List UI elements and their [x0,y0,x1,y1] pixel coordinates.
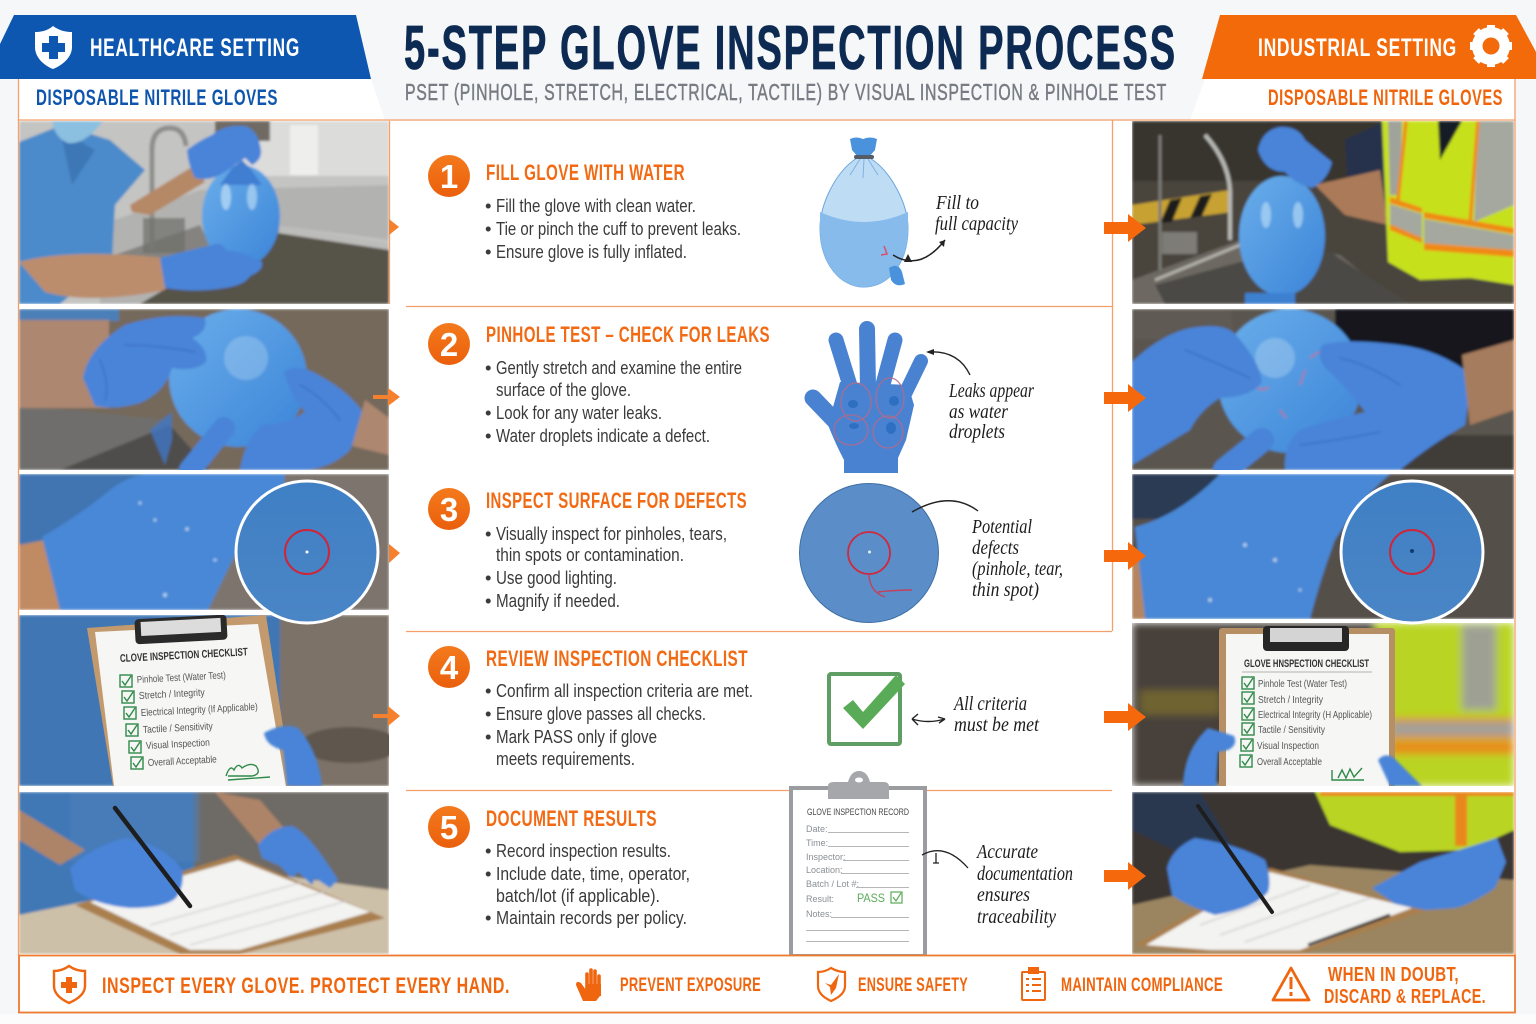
step 2 text [485,357,742,446]
arrows: left flow markers [373,219,400,726]
step 1 text: Tie or pinch the cuff to prevent leaks. [496,218,741,239]
holding glove [264,726,322,786]
illustration: water-filled glove [820,138,908,287]
panel: step 5 [428,771,1073,956]
step 4 text: • [485,703,491,724]
step 5 heading: DOCUMENT RESULTS [486,806,657,831]
checklist rows: Electrical Integrity (H Applicable) [1258,710,1372,721]
inset: healthcare magnified pinhole [236,481,378,623]
checklist rows: Tactile / Sensitivity [143,721,213,736]
checklist boxes [1240,677,1364,780]
step 4 text: Confirm all inspection criteria are met. [496,680,753,701]
step 4 text: Mark PASS only if glove [496,726,657,747]
photo: healthcare documenting [19,792,389,954]
photo: industrial fill glove [1132,121,1514,304]
gutters between photos [19,121,389,955]
step 4 text: meets requirements. [496,748,635,769]
subheading: healthcare gloves: DISPOSABLE NITRILE GLOVES [36,85,278,110]
illustration: inspection record clipboard: Inspector: [806,852,846,862]
icon: compliance clipboard [1022,968,1045,1000]
heading: healthcare setting: HEALTHCARE SETTING [90,34,300,62]
step 3 text: • [485,567,491,588]
checklist rows: Pinhole Test (Water Test) [137,670,226,686]
photo: industrial pinhole test [1132,309,1514,470]
step 4 text [485,680,753,769]
clipboard clip [1263,626,1349,651]
arrows: right flow markers [1104,214,1146,890]
callout: accurate documentation: ensures [977,884,1030,906]
footer warning text [1324,963,1486,1008]
step 2 text: • [485,425,491,446]
checklist rows: Visual Inspection [146,738,210,752]
step 2 text: Gently stretch and examine the entire [496,357,742,378]
callout: all criteria must be met [912,693,1039,736]
step 4 text: • [485,726,491,747]
checklist rows: Visual Inspection [1257,741,1319,752]
step 3 text: Visually inspect for pinholes, tears, [496,523,727,544]
left glove [1167,838,1269,915]
footer: prevent exposure: PREVENT EXPOSURE [620,975,761,996]
step 3 text: Use good lighting. [496,567,617,588]
checklist rows: Tactile / Sensitivity [1258,725,1325,736]
checklist rows: Overall Acceptable [1257,757,1322,768]
callout: fill to full capacity [893,192,1018,262]
checklist title: GLOVE HNSPECTION CHECKLIST [1244,658,1369,670]
step 2 text: • [485,357,491,378]
step 4 text: • [485,680,491,701]
step 5 text: Maintain records per policy. [496,907,687,928]
photo: industrial documenting [1132,792,1514,954]
step 3 text: • [485,523,491,544]
right glove [258,826,338,888]
step number 3: 3 [440,491,458,528]
checklist rows: Overall Acceptable [148,754,217,769]
step number 2 [428,323,470,365]
pen [1198,806,1272,912]
checklist title: CLOVE INSPECTION CHECKLIST [120,646,248,665]
callout: potential defects: Potential [971,516,1032,538]
photo: healthcare checklist [19,615,400,786]
left glove [83,316,206,407]
step number 4: 4 [440,649,459,686]
icon: gear [1470,25,1512,67]
illustration: magnified defect [800,484,938,622]
panel: centre steps background [389,121,1132,955]
step number 4 [428,646,470,688]
photo: healthcare fill glove [19,121,389,304]
callout: fill to full capacity: Fill to [935,192,979,214]
footer panel [19,956,1515,1012]
step 5 text: batch/lot (if applicable). [496,885,660,906]
checklist rows [1257,679,1372,768]
step 5 text: • [485,840,491,861]
illustration: inspection record clipboard [791,771,925,956]
step 1 text [485,195,741,262]
step number 5 [428,806,470,848]
pen [115,808,190,906]
step 1 text: • [485,241,491,262]
left glove [1132,326,1262,465]
step 3 text: • [485,590,491,611]
illustration: inspection record clipboard: GLOVE INSPECTION RECORD [807,807,909,818]
step 3 heading: INSPECT SURFACE FOR DEFECTS [486,488,747,513]
heading: industrial setting: INDUSTRIAL SETTING [1258,34,1457,62]
photo: healthcare pinhole test [19,309,389,470]
lower glove [160,244,262,290]
holding gloves [1183,728,1422,786]
illustration: glove with leaks [813,329,921,473]
callout: leaks appear as water droplets [926,349,1034,443]
step 1 heading: FILL GLOVE WITH WATER [486,160,685,185]
right glove [1285,342,1472,470]
illustration: inspection record clipboard: Batch / Lot #: [806,879,859,889]
left glove [70,838,183,908]
step 5 text: • [485,907,491,928]
right glove [240,368,364,470]
illustration: inspection record clipboard: Date: [806,824,828,834]
step 5 text: • [485,863,491,884]
callout: accurate documentation: traceability [977,906,1056,928]
illustration: inspection record clipboard: PASS [857,891,885,905]
panel: step 4 [428,646,1039,769]
step number 5: 5 [440,809,458,846]
callout: accurate documentation: documentation [977,863,1073,885]
callout: fill to full capacity: full capacity [935,213,1018,235]
checklist rows: Stretch / Integrity [1258,695,1323,706]
photo: industrial surface inspection [1132,474,1514,619]
step 2 heading: PINHOLE TEST – CHECK FOR LEAKS [486,322,770,347]
step 1 text: • [485,218,491,239]
step 1 text: Ensure glove is fully inflated. [496,241,687,262]
checklist rows: Electrical Integrity (If Applicable) [141,702,258,719]
icon: shield plus [54,966,85,1003]
step number 1: 1 [440,158,458,195]
callout: accurate documentation [922,841,1073,928]
callout: potential defects [912,501,1063,601]
illustration: inspection record clipboard: Time: [806,838,828,848]
icon: healthcare shield [35,26,72,69]
photo: industrial checklist [1132,623,1514,788]
step 1 text: • [485,195,491,216]
step 1 text: Fill the glove with clean water. [496,195,696,216]
step 3 text: Magnify if needed. [496,590,620,611]
right glove [1372,838,1506,910]
clipboard clip [134,615,228,644]
step 4 heading: REVIEW INSPECTION CHECKLIST [486,646,748,671]
step number 1 [428,155,470,197]
step 2 text: • [485,402,491,423]
checklist boxes [120,675,270,780]
callout: potential defects: thin spot) [972,579,1039,601]
illustration: inspection record clipboard: Notes: [806,909,832,919]
panel: step 1 [428,138,1018,287]
step 2 text: Look for any water leaks. [496,402,662,423]
callout: all criteria must be met: All criteria [952,693,1027,715]
callout: accurate documentation: Accurate [975,841,1038,863]
footer slogan: INSPECT EVERY GLOVE. PROTECT EVERY HAND. [102,973,510,998]
footer: maintain compliance: MAINTAIN COMPLIANCE [1061,975,1223,996]
step 3 text [485,523,727,611]
illustration: inspection record clipboard: Location: [806,865,843,875]
callout: leaks appear as water droplets: as water [949,401,1008,423]
step 5 text: Include date, time, operator, [496,863,690,884]
icon: safety shield [818,968,845,1001]
inset: industrial magnified pinhole [1341,481,1483,623]
illustration: green check box [829,674,905,744]
callout: potential defects: (pinhole, tear, [972,558,1063,580]
callout: all criteria must be met: must be met [954,714,1039,736]
upper glove [1258,127,1332,188]
panel: healthcare header [0,15,385,120]
step 2 text: Water droplets indicate a defect. [496,425,710,446]
checklist rows: Pinhole Test (Water Test) [1258,679,1347,690]
callout: potential defects: defects [972,537,1019,559]
step 3 text: thin spots or contamination. [496,544,684,565]
icon: hand [576,970,601,1001]
callout: leaks appear as water droplets: droplets [949,421,1005,443]
subtitle: PSET (PINHOLE, STRETCH, ELECTRICAL, TACTILE) BY VISUAL INSPECTION & PINHOLE TEST [405,79,1167,105]
step 5 text [485,840,690,928]
photo: healthcare surface inspection [19,474,389,610]
step 5 text: Record inspection results. [496,840,671,861]
step 4 text: Ensure glove passes all checks. [496,703,706,724]
step 2 text: surface of the glove. [496,379,631,400]
icon: warning triangle [1273,968,1309,1000]
panel: industrial header [1190,15,1536,120]
step number 3 [428,488,470,530]
checklist rows: Stretch / Integrity [139,688,205,702]
footer: ensure safety: ENSURE SAFETY [858,975,968,996]
panel: step 2 [428,322,1034,473]
upper glove [187,126,261,179]
footer warning text: WHEN IN DOUBT, [1328,963,1459,986]
callout: leaks appear as water droplets: Leaks appear [948,380,1034,402]
illustration: inspection record clipboard: Result: [806,894,834,904]
panel: step 3 [428,484,1063,622]
step number 2: 2 [440,326,458,363]
checklist rows [137,670,258,769]
